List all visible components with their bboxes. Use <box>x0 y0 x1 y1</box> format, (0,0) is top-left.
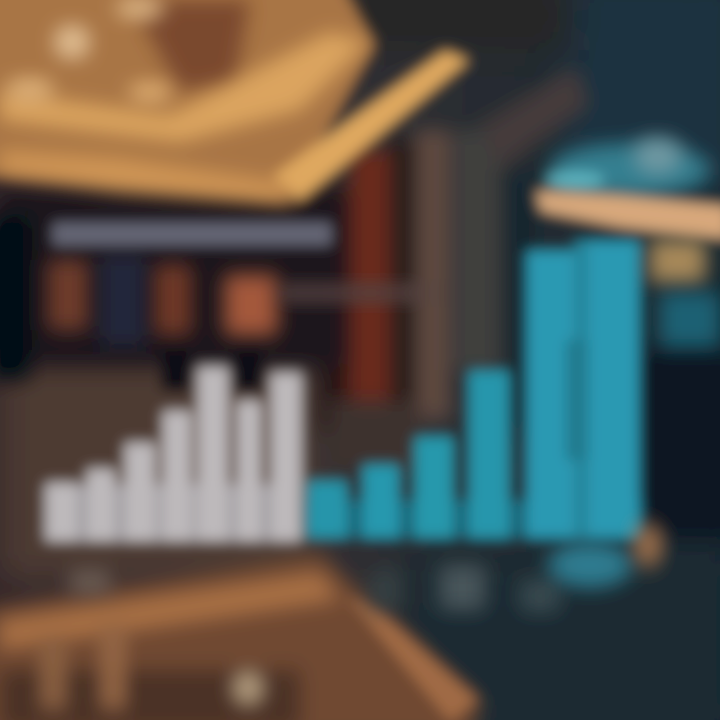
axis labels (blurred) <box>70 565 560 612</box>
floor: warm reflective area <box>0 555 480 720</box>
teal dome <box>545 138 710 196</box>
heading bar (blurred title) <box>52 222 332 246</box>
orange accent with teal splash <box>548 523 662 587</box>
bar chart: grey bars <box>44 366 302 542</box>
bar chart: teal bars <box>306 240 640 538</box>
background columns <box>320 65 590 470</box>
ceiling: golden canopy <box>0 0 470 204</box>
dark wall band with windows <box>0 190 430 390</box>
cream canopy on right <box>535 190 720 347</box>
